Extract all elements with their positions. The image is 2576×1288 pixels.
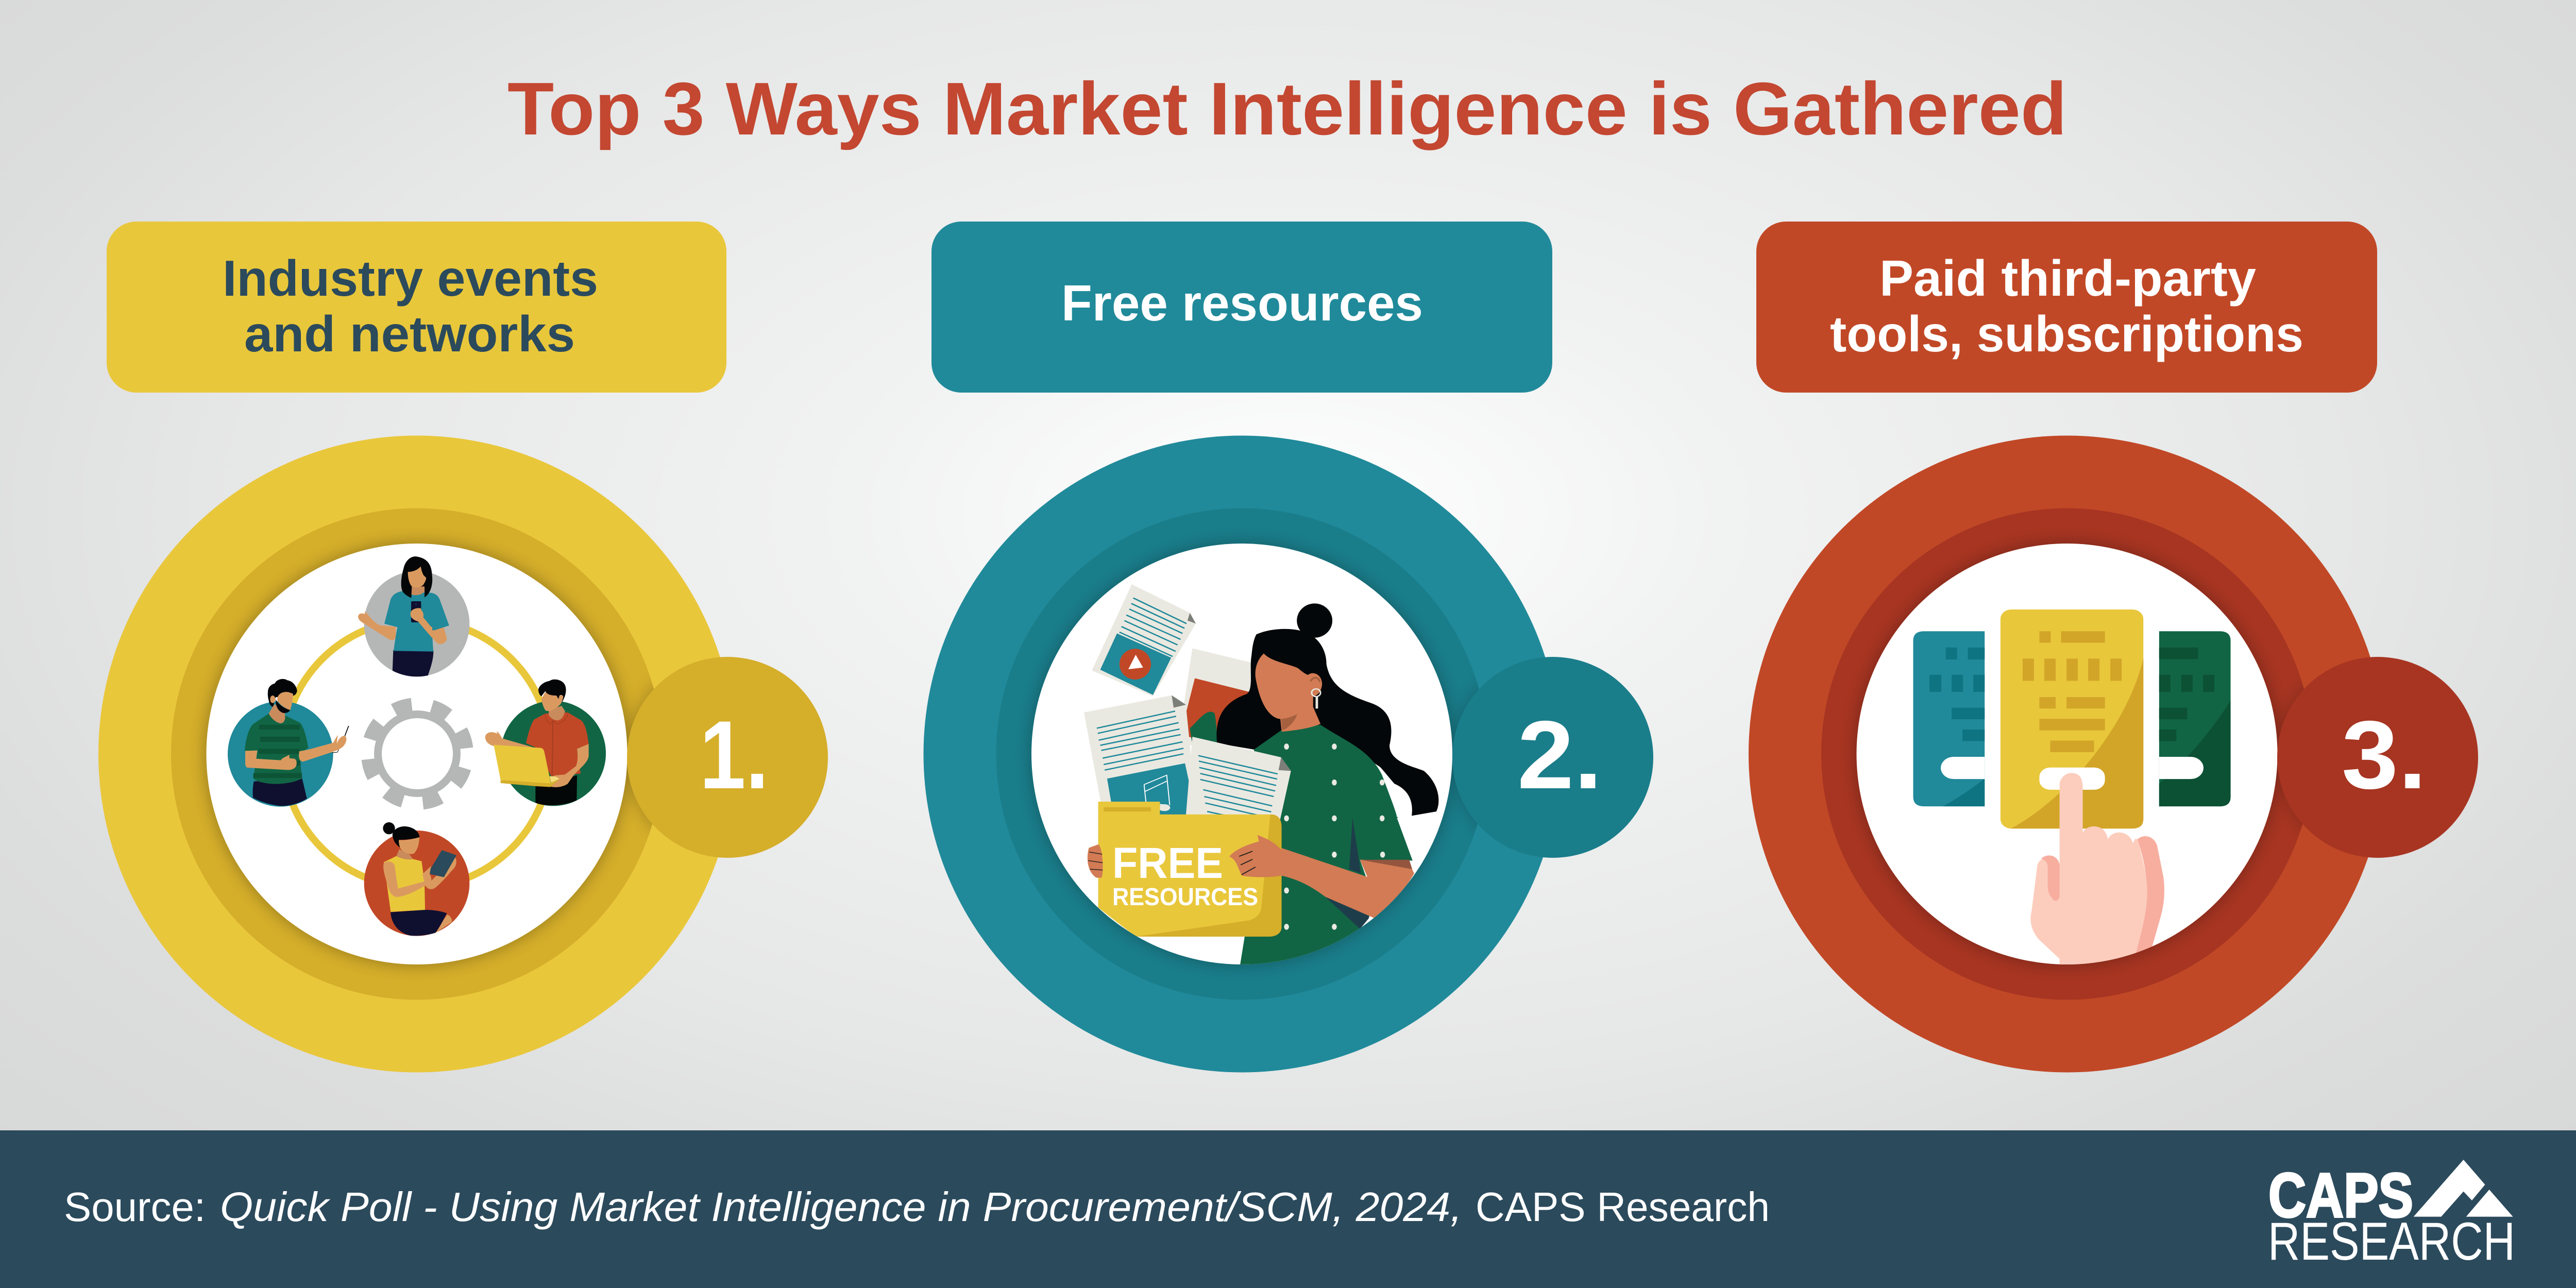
heading box: industry events: and networks [244,306,575,362]
logo: CAPS Research: CAPS [2268,1160,2413,1230]
badge: number 1 [627,657,828,858]
footer band [0,1130,2576,1288]
heading box: paid tools [1756,222,2377,393]
woman: dress [1240,725,1414,964]
icon: gear [350,687,484,821]
heading box: free resources: Free resources [1061,275,1423,331]
document: front page [1185,737,1291,826]
illustration: subscription plans and pointing hand [1913,609,2231,968]
woman: arm and hands [1088,835,1414,918]
logo: CAPS Research [2268,1160,2515,1272]
folder text: free resources: RESOURCES [1112,884,1258,911]
folder [1098,802,1282,937]
source text: Source: [64,1184,206,1230]
panel: paid tools circle [1749,436,2480,1073]
source text: CAPS Research [1476,1184,1770,1230]
person: man with laptop [485,680,606,806]
heading box: paid tools: tools, subscriptions [1830,306,2303,362]
folder text: free resources [1112,839,1258,911]
person: man with phone [228,679,349,807]
illustration: woman holding free resources folder [1084,584,1444,964]
badge: number 3 [2277,657,2478,858]
heading box: industry events: Industry events [223,250,598,307]
plan card: yellow [2001,609,2143,828]
plan card: teal [1913,631,1985,806]
icon: pointing hand [2030,773,2164,968]
panel: free resources circle [923,436,1655,1073]
title: Top 3 Ways Market Intelligence is Gathered [507,67,2067,150]
panel: industry events circle [98,436,829,1073]
woman: hair [1216,603,1438,816]
badge: number 3: 3. [2342,701,2427,809]
heading box: free resources [931,222,1552,393]
logo: CAPS Research: RESEARCH [2268,1212,2515,1272]
woman: neck and face [1256,653,1322,732]
badge: number 1: 1. [700,701,769,809]
document: video page [1092,584,1196,696]
badge: number 2 [1452,657,1653,858]
person: woman with tablet [364,822,469,936]
badge: number 2: 2. [1517,701,1602,809]
document: text page with chart [1084,696,1197,818]
heading box: industry events [107,222,726,393]
woman: polka dots [1284,743,1385,930]
plan card: green [2159,631,2231,806]
source text: Quick Poll - Using Market Intelligence in Procurement/SCM, 2024, [220,1184,1462,1230]
folder text: free resources: FREE [1112,839,1223,887]
person: woman with phone [358,556,469,676]
document: picture page [1184,648,1251,745]
heading box: paid tools: Paid third-party [1879,250,2256,307]
network orbit ring [283,620,551,888]
